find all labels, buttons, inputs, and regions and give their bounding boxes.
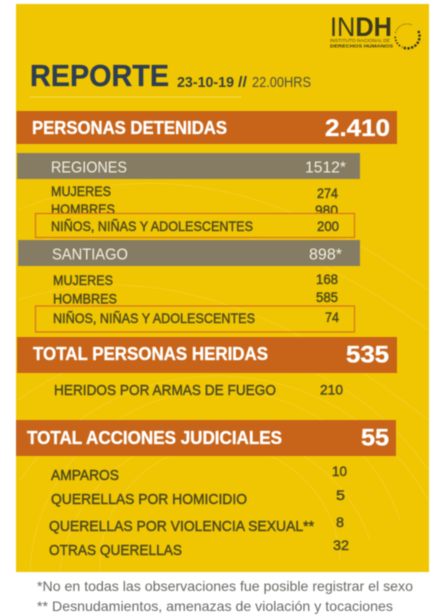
title: 23-10-19 — [177, 74, 234, 91]
callout: regiones niños, niñas y adolescentes — [36, 214, 354, 238]
title: 22.00HRS — [252, 74, 311, 91]
row: santiago hombres: 585 — [316, 289, 338, 305]
panel: personas detenidas header: PERSONAS DETENIDAS — [32, 118, 227, 138]
callout: regiones niños, niñas y adolescentes: NIÑOS, NIÑAS Y ADOLESCENTES — [51, 218, 253, 234]
row: regiones mujeres — [51, 183, 338, 201]
callout: santiago niños, niñas y adolescentes — [36, 306, 354, 332]
panel: regiones header: 1512* — [305, 160, 346, 176]
row: santiago hombres — [53, 289, 338, 306]
row: regiones hombres: 980 — [315, 202, 338, 218]
row: heridos por armas de fuego: 210 — [320, 382, 343, 398]
footnotes — [37, 578, 413, 614]
row: querellas por homicidio: QUERELLAS POR HOMICIDIO — [51, 492, 247, 508]
panel: santiago header: SANTIAGO — [52, 246, 128, 264]
logo: INDH — [330, 12, 420, 48]
callout: santiago niños, niñas y adolescentes: 74 — [325, 309, 339, 325]
row: amparos: 10 — [332, 463, 347, 479]
panel: santiago header: 898* — [309, 246, 342, 264]
panel: total personas heridas header: 535 — [346, 342, 389, 368]
logo: INDH: DERECHOS HUMANOS — [330, 44, 393, 48]
row: amparos: AMPAROS — [51, 468, 119, 484]
panel: personas detenidas header — [16, 111, 397, 144]
title: // — [238, 74, 248, 91]
row: heridos por armas de fuego: HERIDOS POR ARMAS DE FUEGO — [54, 383, 276, 399]
row: querellas por violencia sexual: QUERELLAS POR VIOLENCIA SEXUAL** — [49, 519, 314, 535]
row: santiago mujeres: MUJERES — [53, 272, 113, 288]
row: otras querellas: 32 — [333, 537, 349, 553]
panel: total personas heridas header — [17, 337, 397, 373]
row: querellas por violencia sexual: 8 — [336, 514, 344, 530]
panel: total acciones judiciales header: TOTAL ACCIONES JUDICIALES — [27, 428, 282, 448]
logo: INDH: INDH — [330, 12, 392, 42]
row: santiago mujeres: 168 — [316, 271, 338, 287]
panel: regiones header: REGIONES — [51, 160, 127, 176]
row: querellas por homicidio: 5 — [336, 487, 345, 503]
row: otras querellas — [49, 537, 349, 559]
callout: santiago niños, niñas y adolescentes: NIÑOS, NIÑAS Y ADOLESCENTES — [53, 310, 255, 326]
footnotes: ** Desnudamientos, amenazas de violación y tocaciones — [37, 598, 393, 614]
row: amparos — [51, 463, 347, 484]
row: otras querellas: OTRAS QUERELLAS — [49, 543, 182, 559]
callout: regiones niños, niñas y adolescentes: 200 — [317, 218, 339, 234]
panel: total acciones judiciales header: 55 — [361, 424, 389, 452]
footnotes: *No en todas las observaciones fue posible registrar el sexo — [37, 578, 413, 594]
panel: total acciones judiciales header — [16, 420, 396, 456]
title: REPORTE — [30, 58, 169, 93]
row: regiones mujeres: 274 — [317, 185, 338, 201]
row: regiones mujeres: MUJERES — [51, 183, 111, 199]
row: regiones hombres — [51, 201, 338, 218]
row: santiago mujeres — [53, 271, 338, 288]
panel: regiones header — [17, 153, 360, 179]
row: santiago hombres: HOMBRES — [53, 290, 117, 306]
row: regiones hombres: HOMBRES — [51, 201, 115, 217]
logo: INDH: INSTITUTO NACIONAL DE — [330, 38, 390, 43]
row: querellas por homicidio — [51, 487, 345, 508]
panel: santiago header — [18, 240, 360, 266]
panel: personas detenidas header: 2.410 — [325, 115, 390, 142]
panel: total personas heridas header: TOTAL PERSONAS HERIDAS — [33, 344, 268, 364]
title — [30, 58, 311, 97]
